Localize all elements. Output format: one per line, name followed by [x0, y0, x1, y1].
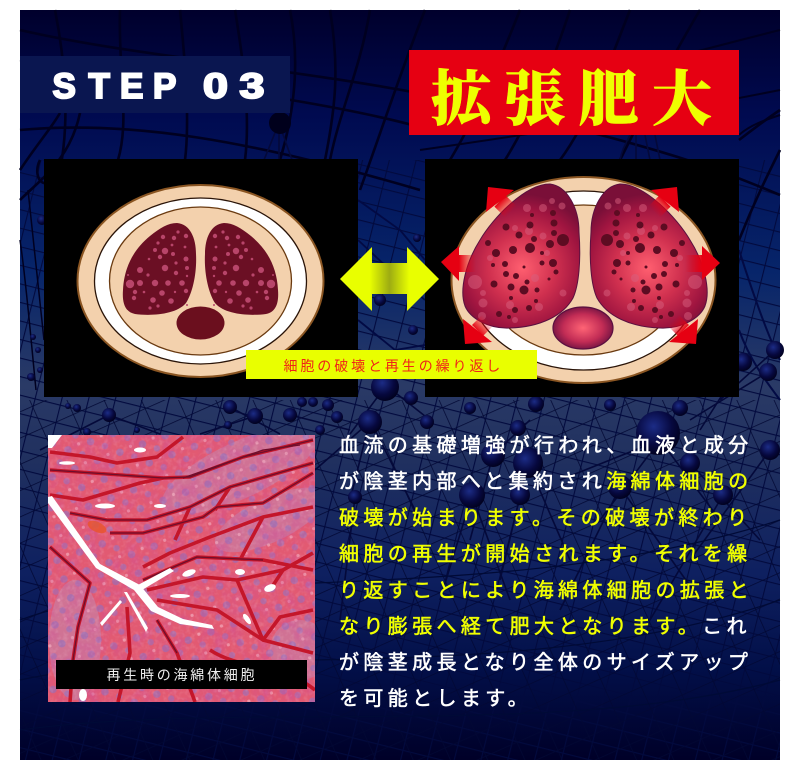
left corpus: [123, 223, 196, 315]
tissue photo: [48, 435, 315, 702]
inner tissue: [110, 207, 292, 355]
panel: normal cross-section: [44, 159, 358, 397]
caption text: 細胞の破壊と再生の繰り返し: [284, 358, 503, 374]
photo caption bar: [56, 660, 307, 689]
arrow: bottom right: [667, 314, 698, 344]
caption band: [246, 350, 537, 379]
title text: 拡張肥大: [431, 67, 726, 133]
arrow: top right: [648, 187, 679, 218]
step heading bar: [20, 56, 290, 113]
right enlarged corpus: [590, 184, 707, 328]
body text: り返すことにより海綿体細胞の拡張と: [339, 579, 753, 602]
photo caption text: 再生時の海綿体細胞: [106, 667, 257, 683]
orange patch in tissue: [88, 520, 106, 534]
outer skin ring: [78, 185, 324, 377]
body text: が陰茎内部へと集約され海綿体細胞の: [339, 470, 752, 493]
step heading text: STEP: [52, 67, 176, 106]
body text: なり膨張へ経て肥大となります。これ: [339, 615, 751, 638]
right corpus: [205, 223, 278, 315]
arrow: top left: [486, 187, 517, 218]
double arrow: [340, 247, 439, 311]
body text: [339, 434, 753, 710]
step heading text: 03: [203, 67, 264, 106]
white ring: [94, 198, 306, 364]
arrow: left: [441, 246, 476, 281]
arrow: right: [685, 246, 720, 280]
body text: 細胞の再生が開始されます。それを繰: [339, 542, 751, 566]
left enlarged corpus: [463, 184, 580, 328]
urethra enlarged: [553, 307, 613, 349]
outer skin ring: [452, 177, 716, 383]
body text: を可能とします。: [339, 687, 532, 710]
title box: [409, 50, 739, 135]
inner tissue: [486, 205, 680, 355]
urethra: [176, 306, 224, 340]
step heading text: [52, 67, 264, 106]
body text: 破壊が始まります。その破壊が終わり: [339, 506, 751, 530]
arrow: bottom left: [463, 314, 494, 344]
body text: が陰茎成長となり全体のサイズアップ: [339, 651, 752, 674]
panel: enlarged cross-section: [425, 159, 739, 397]
white ring: [468, 191, 698, 370]
body text: 血流の基礎増強が行われ、血液と成分: [339, 434, 753, 457]
